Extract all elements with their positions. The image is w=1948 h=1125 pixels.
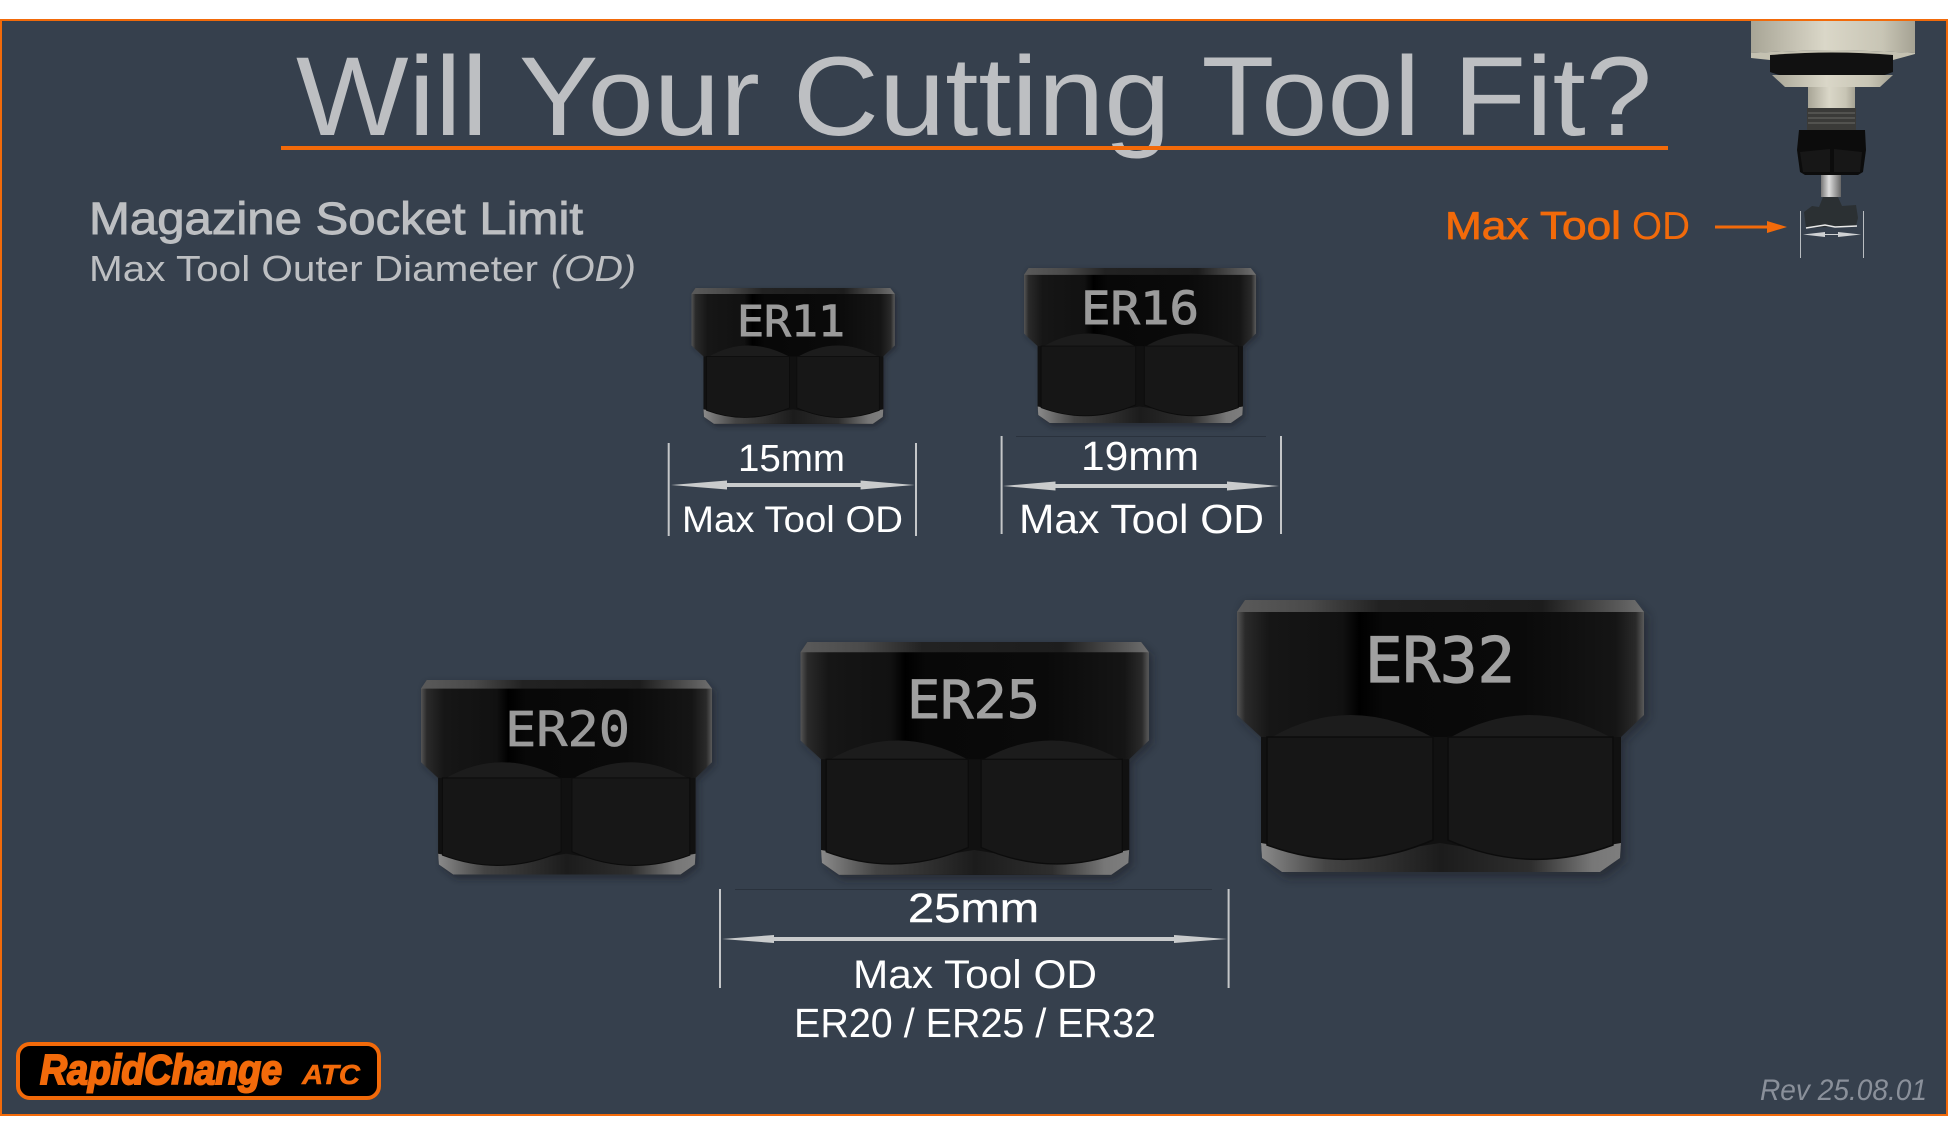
callout: max tool OD: Max Tool [1445,205,1621,248]
dimension: ER11 15mm [669,438,916,540]
dimension: ER16 19mm [1002,433,1281,542]
label: max tool OD: Max Tool OD [853,953,1097,997]
revision label: Rev 25.08.01 [1760,1074,1927,1107]
logo: RapidChange ATC [18,1044,379,1098]
nut: ER20: ER20 [505,702,630,758]
title: Will Your Cutting Tool Fit? [296,34,1652,159]
value: 15mm: 15mm [738,438,845,480]
value: 25mm: 25mm [908,885,1039,931]
nut: ER16: ER16 [1081,282,1199,335]
callout: max tool OD [1445,205,1787,248]
arrow: callout to cutter [1715,221,1787,233]
nut: ER32: ER32 [1365,624,1515,697]
label: max tool OD: Max Tool OD [1019,496,1264,542]
label: ER20 / ER25 / ER32: ER20 / ER25 / ER32 [794,1000,1156,1046]
heading: magazine socket limit: Magazine Socket Limit [89,193,584,244]
callout: max tool OD: OD [1632,205,1690,248]
nut: ER32 [1237,600,1648,878]
logo: RapidChange ATC: RapidChange [40,1046,282,1093]
logo suffix: ATC [301,1059,361,1090]
value: 19mm: 19mm [1081,433,1199,479]
subheading: max tool outer diameter: Max Tool Outer Diameter [89,248,538,289]
heading: magazine socket limit [89,193,636,289]
dimension: cutter diameter [1800,211,1864,258]
nut: ER25: ER25 [907,670,1040,731]
nut: ER20 [421,680,715,879]
subheading abbreviation: (OD) [551,248,636,289]
nut: ER16 [1024,268,1258,426]
nut: ER25 [800,642,1152,880]
label: max tool OD: Max Tool OD [682,499,903,540]
icon: spindle with collet nut and cutter [1751,21,1915,258]
nut: ER11: ER11 [737,297,845,347]
nut: ER11 [692,288,897,427]
dimension: ER20 ER25 ER32 25mm [720,885,1229,1046]
